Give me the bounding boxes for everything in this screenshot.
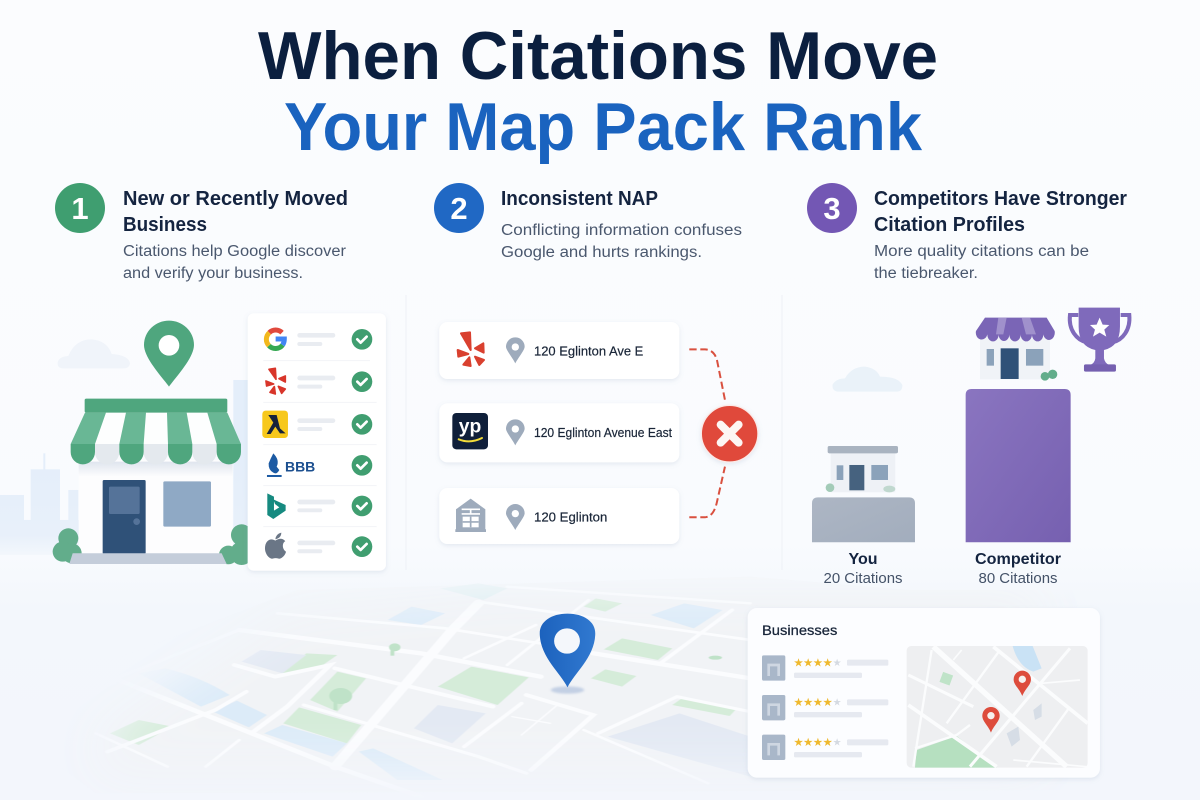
trees [329, 643, 722, 710]
card: building address [439, 488, 679, 544]
panel: inconsistent NAP [439, 322, 758, 544]
label: You: 20 Citations [824, 571, 902, 587]
step 1 header [55, 183, 348, 282]
icon: Yellow Pages [262, 411, 288, 438]
title: When Citations Move [258, 18, 938, 94]
results list: ★ [833, 738, 842, 749]
icon: red pin 1 [1014, 671, 1031, 696]
results list [762, 655, 888, 760]
panel: local pack results [748, 608, 1100, 778]
awning [71, 399, 241, 464]
icon: conflict X [701, 405, 758, 462]
card: YP address: 120 Eglinton Avenue East [534, 425, 672, 440]
results list: ★ [833, 658, 842, 669]
description 1: and verify your business. [123, 265, 303, 282]
icon: blue map pin [540, 614, 595, 694]
icon: Yelp [266, 368, 285, 394]
heading 2: Inconsistent NAP [501, 188, 658, 210]
water [139, 603, 723, 780]
description 3: More quality citations can be [874, 243, 1089, 260]
roads [130, 612, 748, 750]
cloud [58, 339, 130, 368]
panel: new business illustration [0, 313, 386, 571]
competitor shop [976, 318, 1057, 381]
dashed connector top [689, 349, 725, 400]
storefront [53, 399, 253, 565]
door [103, 480, 146, 554]
badge 2 [434, 183, 484, 233]
heading 3: Citation Profiles [874, 214, 1025, 236]
card: YP address: yp [459, 416, 481, 437]
card: YP address [439, 403, 679, 462]
card: building address: 120 Eglinton [534, 510, 607, 525]
label: Competitor [975, 551, 1061, 587]
shrubs [53, 524, 253, 565]
results list: ★★★★ [793, 697, 833, 709]
icon: Apple [265, 533, 286, 559]
icon: BBB: BBB [285, 458, 315, 474]
city skyline [0, 380, 251, 555]
card: Yelp address: 120 Eglinton Ave E [534, 343, 643, 358]
parks [110, 598, 737, 745]
competitor bar [966, 389, 1071, 542]
badge 2: 2 [450, 191, 468, 226]
window [163, 481, 211, 527]
title: Your Map Pack Rank [284, 89, 922, 165]
panel: citation checklist [248, 313, 386, 571]
icon: red pin 2 [982, 707, 1000, 733]
step 2 header [434, 183, 742, 261]
check marks [352, 329, 372, 557]
badge 3: 3 [823, 191, 841, 226]
panel: citation comparison [812, 308, 1129, 542]
label: Competitor: 80 Citations [978, 571, 1058, 587]
background map [110, 584, 748, 780]
step [69, 553, 227, 564]
your bar [812, 497, 915, 542]
icon: BBB [267, 453, 315, 477]
label: Competitor: Competitor [975, 551, 1061, 568]
icon: Bing [267, 493, 286, 519]
description 2: Google and hurts rankings. [501, 244, 702, 261]
your shop [826, 446, 898, 492]
icon: trophy [1070, 308, 1129, 372]
title [258, 18, 938, 165]
results list: ★★★★ [793, 737, 833, 749]
label: You [824, 551, 902, 587]
badge 1: 1 [71, 191, 89, 226]
heading 1: Business [123, 214, 207, 236]
badge 3 [807, 183, 857, 233]
description 2: Conflicting information confuses [501, 222, 742, 239]
badge 1 [55, 183, 105, 233]
label: You: You [848, 551, 878, 568]
results list: ★★★★ [793, 657, 833, 669]
cloud [833, 367, 902, 392]
description 1: Citations help Google discover [123, 243, 346, 260]
icon: location pin [144, 321, 194, 387]
mini map [907, 646, 1088, 768]
card: Yelp address [439, 322, 679, 379]
results list: ★ [833, 698, 842, 709]
icon: Google [266, 330, 284, 348]
description 3: the tiebreaker. [874, 265, 978, 282]
heading 1: New or Recently Moved [123, 188, 348, 210]
step 3 header [807, 183, 1127, 282]
heading 3: Competitors Have Stronger [874, 188, 1127, 210]
placeholder lines [297, 333, 335, 553]
dashed connector bottom [689, 467, 725, 517]
panel title: Businesses [762, 622, 837, 638]
